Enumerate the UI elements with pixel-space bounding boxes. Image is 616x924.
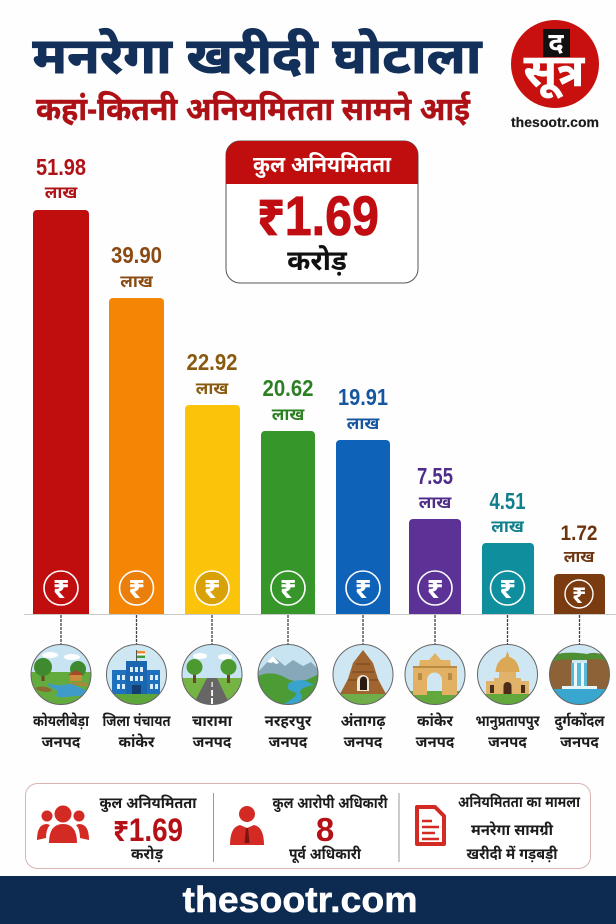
icon: road with trees bbox=[182, 644, 242, 705]
logo: the sootr bbox=[511, 20, 599, 130]
bar: कोयलीबेड़ा 51.98 bbox=[33, 154, 89, 614]
labels: block names: कांकेर bbox=[417, 712, 453, 730]
bar: चारामा 22.92: लाख bbox=[196, 379, 229, 398]
bar: कोयलीबेड़ा 51.98: लाख bbox=[45, 183, 78, 202]
summary panel: 8 bbox=[316, 811, 334, 848]
summary panel: करोड़ bbox=[131, 846, 163, 863]
bar: भानुप्रतापपुर 4.51: लाख bbox=[491, 517, 525, 536]
labels: block names: जनपद bbox=[42, 734, 81, 751]
bar: कोयलीबेड़ा 51.98: ₹ bbox=[53, 573, 69, 605]
callout: total irregularity bbox=[226, 141, 418, 283]
summary panel: अनियमितता का मामला bbox=[458, 794, 581, 811]
logo: the sootr: thesootr.com bbox=[511, 114, 599, 130]
bar: कोयलीबेड़ा 51.98: 51.98 bbox=[36, 154, 86, 180]
logo: the sootr: द bbox=[548, 28, 564, 58]
icon: village landscape bbox=[31, 644, 91, 705]
labels: block names: जिला पंचायत bbox=[102, 713, 171, 730]
labels: block names: चारामा bbox=[192, 713, 233, 730]
labels: block names: जनपद bbox=[193, 734, 232, 751]
bar: भानुप्रतापपुर 4.51 bbox=[482, 488, 534, 614]
labels: block names: अंतागढ़ bbox=[341, 713, 386, 730]
bar: जिला पंचायत 39.90: 39.90 bbox=[111, 242, 162, 268]
bar: कांकेर 7.55: 7.55 bbox=[417, 463, 453, 489]
labels: block names: जनपद bbox=[269, 734, 308, 751]
icon: government building bbox=[106, 644, 168, 705]
bar: नरहरपुर 20.62: 20.62 bbox=[262, 375, 314, 401]
title: मनरेगा खरीदी घोटाला bbox=[32, 28, 483, 84]
icon: mountains and river bbox=[258, 644, 319, 705]
labels: block names: भानुप्रतापपुर bbox=[476, 713, 540, 731]
bar: भानुप्रतापपुर 4.51: ₹ bbox=[499, 573, 516, 605]
icon: officer bbox=[230, 806, 264, 845]
bar: नरहरपुर 20.62: ₹ bbox=[280, 573, 296, 605]
bar: दुर्गकोंदल 1.72 bbox=[554, 522, 605, 614]
callout: total irregularity: करोड़ bbox=[287, 244, 348, 276]
icon: domed building bbox=[477, 644, 539, 706]
summary panel bbox=[26, 784, 590, 868]
summary panel: कुल आरोपी अधिकारी bbox=[272, 795, 388, 813]
bar: अंतागढ़ 19.91: ₹ bbox=[355, 573, 371, 605]
icon: gate arch bbox=[405, 644, 465, 705]
bar: नरहरपुर 20.62: लाख bbox=[272, 405, 305, 424]
bar: कांकेर 7.55: ₹ bbox=[427, 573, 443, 605]
bar: चारामा 22.92: 22.92 bbox=[186, 349, 238, 375]
bar: भानुप्रतापपुर 4.51: 4.51 bbox=[490, 488, 526, 514]
bar: अंतागढ़ 19.91 bbox=[336, 384, 390, 614]
bar: जिला पंचायत 39.90: लाख bbox=[120, 272, 154, 291]
bar: दुर्गकोंदल 1.72: 1.72 bbox=[560, 522, 598, 545]
callout: total irregularity: कुल अनियमितता bbox=[253, 152, 391, 178]
labels: block names: जनपद bbox=[344, 734, 383, 751]
bar: दुर्गकोंदल 1.72: लाख bbox=[564, 549, 595, 566]
summary panel: ₹1.69 bbox=[113, 812, 183, 848]
subtitle: कहां-कितनी अनियमितता सामने आई bbox=[36, 91, 471, 127]
labels: block names: जनपद bbox=[560, 734, 599, 751]
bar: जिला पंचायत 39.90: ₹ bbox=[128, 573, 145, 605]
labels: block names: जनपद bbox=[488, 734, 527, 751]
connector lines bbox=[61, 615, 580, 644]
footer band: thesootr.com bbox=[182, 879, 418, 920]
bar: अंतागढ़ 19.91: 19.91 bbox=[338, 384, 388, 410]
summary panel: पूर्व अधिकारी bbox=[289, 845, 362, 864]
labels: block names: कोयलीबेड़ा bbox=[33, 712, 90, 730]
labels: block names: नरहरपुर bbox=[265, 713, 312, 731]
icon: document bbox=[417, 807, 444, 844]
labels: block names: कांकेर bbox=[119, 733, 155, 751]
bar: अंतागढ़ 19.91: लाख bbox=[347, 414, 380, 433]
bar: चारामा 22.92 bbox=[185, 349, 240, 614]
bar: नरहरपुर 20.62 bbox=[261, 375, 315, 614]
bar: कांकेर 7.55 bbox=[409, 463, 461, 614]
icon: people group bbox=[37, 806, 89, 843]
summary panel: खरीदी में गड़बड़ी bbox=[466, 845, 558, 863]
bar: जिला पंचायत 39.90 bbox=[109, 242, 164, 614]
summary panel: कुल अनियमितता bbox=[100, 795, 197, 813]
callout: total irregularity: ₹1.69 bbox=[257, 184, 379, 247]
bar: चारामा 22.92: ₹ bbox=[204, 573, 220, 605]
footer band bbox=[0, 876, 616, 924]
baseline bbox=[24, 614, 616, 616]
summary panel: मनरेगा सामग्री bbox=[471, 821, 554, 839]
labels: block names: दुर्गकोंदल bbox=[554, 712, 605, 731]
icon: waterfall bbox=[549, 644, 612, 705]
labels: block names bbox=[33, 712, 605, 751]
logo: the sootr: सूत्र bbox=[524, 45, 585, 99]
labels: block names: जनपद bbox=[416, 734, 455, 751]
bar: दुर्गकोंदल 1.72: ₹ bbox=[572, 581, 586, 609]
bar: कांकेर 7.55: लाख bbox=[419, 493, 452, 512]
icon: temple bbox=[333, 644, 393, 705]
